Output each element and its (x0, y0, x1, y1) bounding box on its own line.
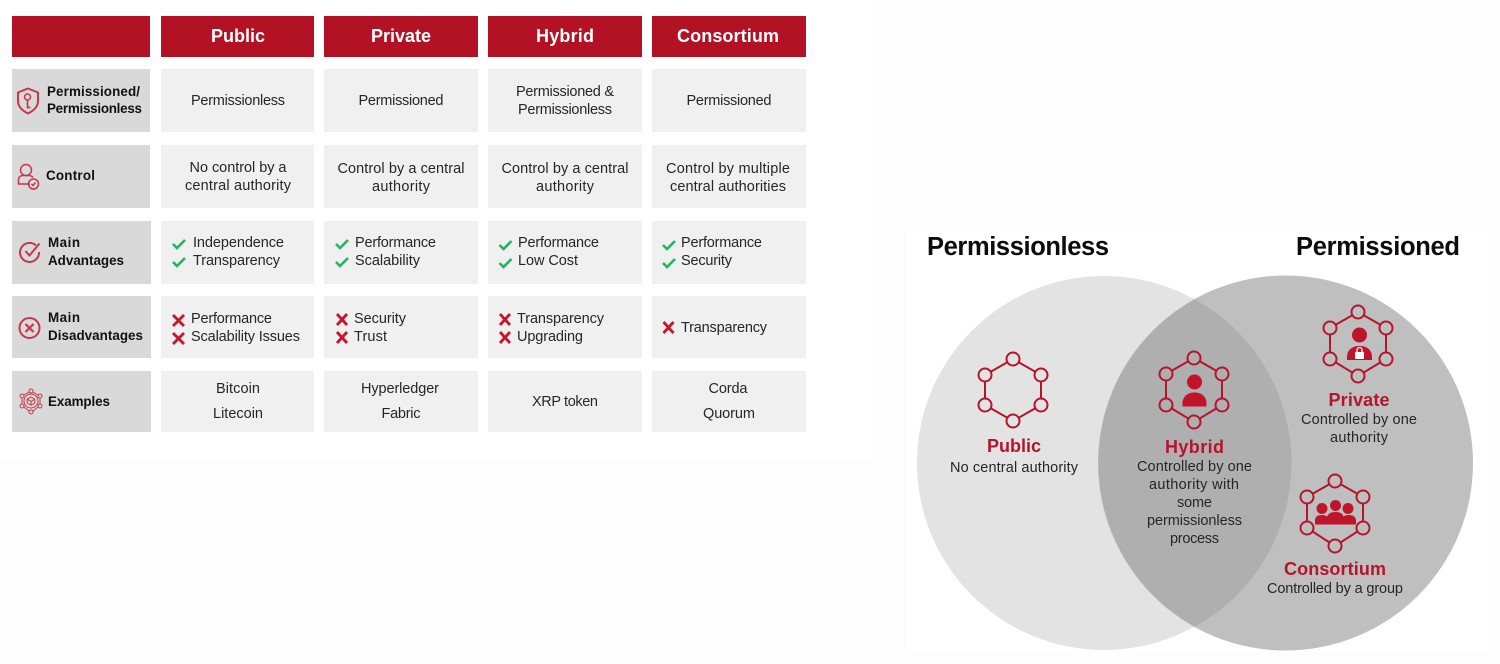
segment: public (950, 352, 1079, 476)
row: main advantages: Transparency (193, 253, 281, 269)
row: main disadvantages: Transparency (517, 311, 605, 327)
row: main disadvantages: Main (48, 310, 80, 325)
venn diagram (917, 233, 1473, 650)
row: permissioned or permissionless: Permissionless (518, 102, 612, 118)
table header row: Private (371, 26, 431, 46)
row: control: Control by multiple (666, 161, 790, 177)
row: permissioned or permissionless (12, 69, 806, 132)
row: main advantages: Main (48, 235, 80, 250)
row: permissioned or permissionless: Permissionless (191, 93, 285, 109)
row: control: central authorities (670, 179, 786, 195)
heading: permissionless: Permissionless (927, 233, 1109, 261)
row: permissioned or permissionless: Permissionless (47, 101, 142, 116)
segment: hybrid: Controlled by one (1137, 459, 1252, 475)
row: main advantages: Low Cost (518, 253, 578, 269)
table header row: Public (211, 26, 265, 46)
heading: permissioned: Permissioned (1296, 233, 1460, 261)
row: main advantages: Security (681, 253, 733, 269)
segment: private: authority (1330, 430, 1389, 446)
segment: consortium (1267, 474, 1403, 597)
row: examples: Hyperledger (361, 381, 439, 397)
segment: consortium: Consortium (1284, 559, 1386, 579)
row: main disadvantages: Scalability Issues (191, 329, 300, 345)
table header row (12, 16, 806, 57)
segment: public: No central authority (950, 460, 1079, 476)
row: main advantages: Performance (681, 235, 762, 251)
row: main disadvantages: Upgrading (517, 329, 583, 345)
row: main disadvantages: Security (354, 311, 407, 327)
row: main advantages: Independence (193, 235, 284, 251)
row: main advantages: Performance (355, 235, 436, 251)
circle overlap (1098, 299, 1291, 627)
row: control: central authority (185, 178, 292, 194)
icon: hexagon network with person (1160, 352, 1228, 428)
icon: open hexagon network (978, 352, 1048, 428)
icon: hexagon network with locked person (1324, 306, 1392, 382)
row: control (12, 145, 806, 208)
circle: permissioned (1098, 276, 1473, 650)
row: examples: Bitcoin (216, 381, 260, 397)
row: control: authority (536, 179, 595, 195)
row: permissioned or permissionless: Permissioned & (516, 84, 614, 100)
row: main disadvantages: Performance (191, 311, 272, 327)
row: main disadvantages: Transparency (681, 320, 768, 336)
row: permissioned or permissionless: Permissioned (686, 93, 772, 109)
icon: circled check (20, 243, 40, 262)
segment: public: Public (987, 436, 1041, 456)
row: permissioned or permissionless: Permissioned (358, 93, 444, 109)
row: examples (12, 371, 806, 432)
segment: hybrid: Hybrid (1165, 437, 1224, 457)
segment: hybrid: permissionless (1147, 513, 1242, 529)
row: examples: Litecoin (213, 406, 263, 422)
row: main advantages: Advantages (48, 253, 124, 268)
row: main disadvantages: Disadvantages (48, 328, 143, 343)
row: examples: XRP token (532, 394, 598, 410)
row: control: authority (372, 179, 431, 195)
row: control: Control by a central (338, 161, 464, 177)
segment: hybrid: some (1177, 495, 1212, 511)
segment: private: Controlled by one (1301, 412, 1417, 428)
row: examples: Fabric (382, 406, 420, 422)
row: control: No control by a (190, 160, 287, 176)
segment: private (1301, 306, 1417, 446)
icon: circled cross (20, 318, 40, 338)
row: examples: Corda (708, 381, 748, 397)
segment: hybrid: process (1170, 531, 1219, 547)
row: main advantages: Performance (518, 235, 599, 251)
row: control: Control by a central (502, 161, 628, 177)
segment: consortium: Controlled by a group (1267, 581, 1403, 597)
segment: private: Private (1328, 390, 1390, 410)
row: main advantages (12, 221, 806, 284)
table header row: Hybrid (536, 26, 594, 46)
icon: shield with key (18, 88, 38, 114)
comparison table (12, 16, 806, 432)
segment: hybrid (1137, 352, 1252, 547)
row: permissioned or permissionless: Permissioned/ (47, 84, 140, 99)
row: examples: Quorum (703, 406, 755, 422)
row: main advantages: Scalability (355, 253, 421, 269)
segment: hybrid: authority with (1149, 477, 1239, 493)
table header row: Consortium (677, 26, 779, 46)
icon: person with check (18, 164, 38, 189)
row: examples: Examples (48, 394, 110, 409)
icon: hexagon network with group (1300, 474, 1370, 552)
icon: cube network (20, 389, 42, 414)
row: main disadvantages (12, 296, 806, 358)
row: main disadvantages: Trust (354, 329, 387, 345)
circle: permissionless (917, 276, 1291, 650)
row: control: Control (46, 168, 95, 183)
